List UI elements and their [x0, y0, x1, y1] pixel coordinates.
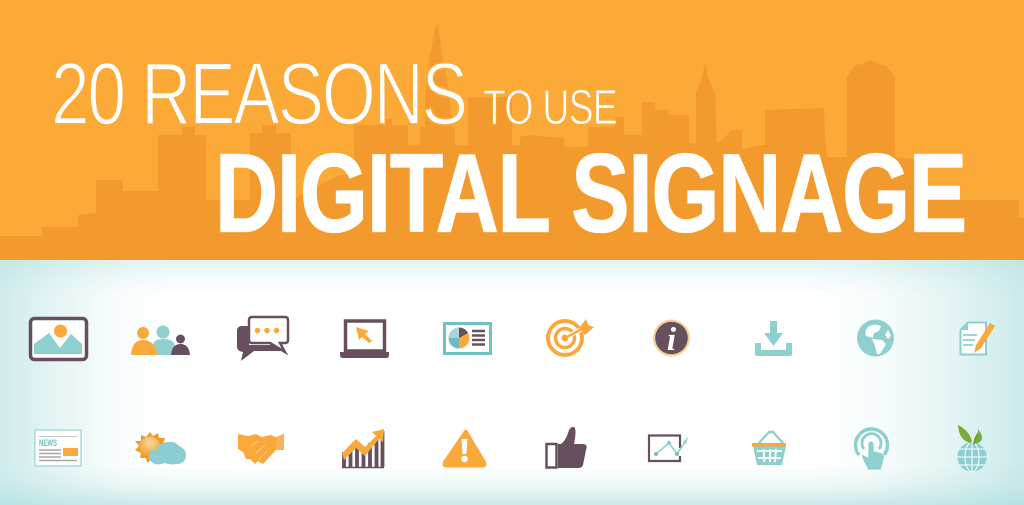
icon: news: NEWS — [39, 438, 57, 449]
icon: info — [653, 320, 690, 358]
icon: globe — [857, 320, 894, 356]
heading line: 20 reasons: 20 REASONS — [51, 44, 466, 143]
icon: warning — [443, 430, 486, 467]
icon: download — [755, 321, 792, 356]
icon: touch — [856, 429, 888, 470]
icon: info: i — [667, 322, 677, 358]
icon: people — [131, 326, 190, 355]
icon: pie chart card — [444, 324, 490, 354]
icon: handshake — [238, 434, 284, 464]
icon: growth chart — [342, 429, 384, 468]
orange banner — [0, 0, 1024, 260]
city skyline silhouette — [0, 25, 1024, 260]
icon: picture — [30, 318, 86, 360]
icon: thumbs up — [546, 427, 587, 468]
icon: shopping basket — [752, 432, 786, 465]
icon: document with pencil — [960, 322, 995, 354]
lower background with teal vignette — [0, 260, 1024, 505]
icon: globe with leaves — [957, 425, 987, 472]
icon: sun and cloud — [135, 432, 186, 464]
icon grid — [30, 317, 995, 472]
icon: chat bubbles — [237, 317, 288, 361]
icon: line chart frame — [649, 436, 688, 461]
icon: news — [35, 430, 81, 466]
icon: target with dart — [548, 319, 594, 355]
icon: laptop with cursor — [340, 321, 389, 358]
heading line: to use: TO USE — [483, 81, 617, 135]
